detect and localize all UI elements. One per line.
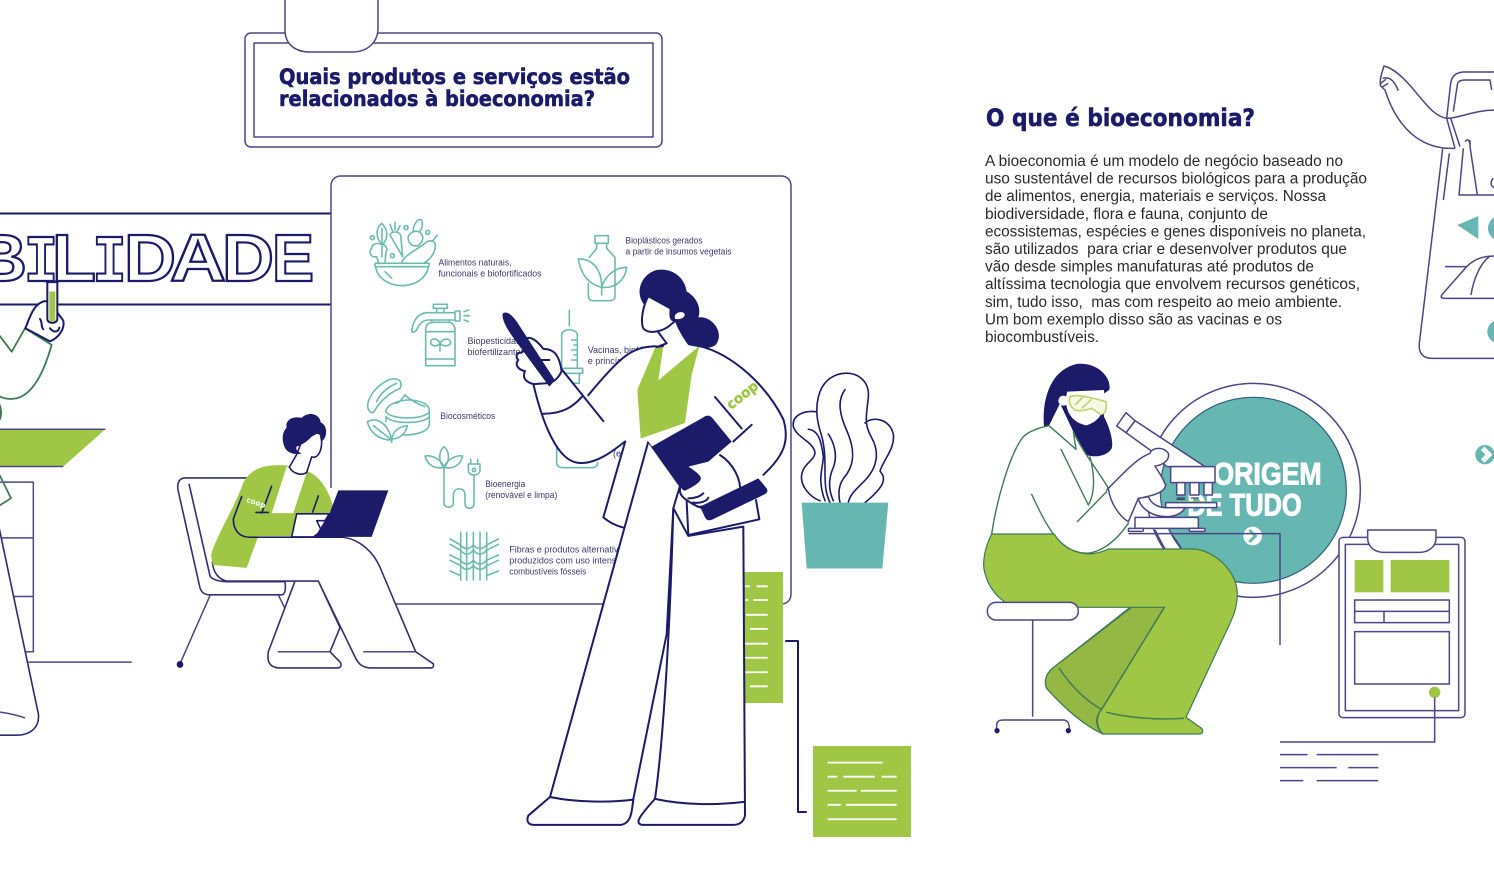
clipboard xyxy=(1339,530,1465,718)
jacket lines xyxy=(233,486,343,537)
illustration: woman presenting xyxy=(503,270,786,825)
hill xyxy=(1441,256,1494,298)
body paragraph: sim, tudo isso, mas com respeito ao meio ambiente. xyxy=(985,294,1342,311)
label: vacinas: Vacinas, biofármacos xyxy=(588,345,674,355)
callout lines xyxy=(1280,697,1435,781)
torso and right sleeve xyxy=(640,346,786,501)
pen xyxy=(503,313,555,387)
banner: BILIDADE: I xyxy=(24,226,58,302)
label: alimentos: funcionais e biofortificados xyxy=(438,268,542,278)
hand xyxy=(292,514,329,537)
trousers xyxy=(527,441,680,825)
illustration: green note sheets xyxy=(744,572,911,837)
arm and hand xyxy=(1107,448,1169,522)
neck and face xyxy=(642,296,675,347)
heading text: Quais produtos e serviços estão xyxy=(279,65,630,89)
coop sleeve logo: coop xyxy=(724,378,762,413)
body paragraph: ecossistemas, espécies e genes disponíveis no planeta, xyxy=(985,223,1366,240)
goggles xyxy=(1069,396,1106,414)
banner: BILIDADE: D xyxy=(222,221,274,296)
board icons, right column xyxy=(425,236,627,508)
label: fibras: combustíveis fósseis xyxy=(509,566,587,576)
label: biopesticidas: Biopesticidas e xyxy=(468,336,528,346)
label: alimentos: Alimentos naturais, xyxy=(438,258,512,268)
circle button: origem de tudo xyxy=(1146,383,1360,597)
sleeve xyxy=(0,328,52,505)
coat tail xyxy=(603,419,647,527)
label: bioplásticos: Bioplásticos gerados xyxy=(626,236,703,246)
banner: BILIDADE: E xyxy=(272,221,314,296)
fingers xyxy=(680,486,713,508)
pointing arm lines xyxy=(533,346,656,463)
connector xyxy=(786,641,806,812)
heading text: relacionados à bioeconomia? xyxy=(279,87,595,111)
test tube xyxy=(47,282,57,323)
connector line xyxy=(1128,534,1280,645)
body paragraph: de alimentos, energia, materiais e serviços. Nossa xyxy=(985,188,1326,205)
body paragraph: Um bom exemplo disso são as vacinas e os xyxy=(985,311,1282,328)
vest xyxy=(637,346,699,439)
note: tall xyxy=(744,572,783,703)
tablet top xyxy=(652,416,732,491)
label: fibras: produzidos com uso intenso de xyxy=(509,556,634,566)
hair xyxy=(1044,364,1112,456)
banner: BILIDADE: L xyxy=(52,221,96,296)
scientist leg xyxy=(0,524,39,735)
lower coat panel xyxy=(687,500,759,535)
banner: BILIDADE xyxy=(0,214,331,304)
neck and face xyxy=(289,431,322,474)
label: vacinas: e princípios ativos xyxy=(588,356,660,366)
icon: sprayer xyxy=(412,304,469,366)
icon: salad bowl xyxy=(370,220,437,286)
board labels xyxy=(438,236,732,576)
teal shapes xyxy=(1457,216,1478,239)
icon: box partly hidden xyxy=(557,443,598,468)
microscope xyxy=(1117,413,1217,549)
torso xyxy=(992,426,1128,550)
stool xyxy=(987,602,1078,733)
body paragraph: biocombustíveis. xyxy=(985,329,1099,346)
pointing arm fill xyxy=(533,346,657,463)
arm xyxy=(1380,66,1494,148)
button text: ORIGEM xyxy=(1213,457,1322,492)
pants xyxy=(212,537,433,668)
laptop xyxy=(315,490,388,537)
face xyxy=(1066,390,1104,425)
body paragraph: biodiversidade, flora e fauna, conjunto de xyxy=(985,206,1268,223)
label: fibras: Fibras e produtos alternativos xyxy=(509,544,628,554)
illustration: left scientist (partial) xyxy=(0,281,132,735)
pot xyxy=(802,503,888,569)
shaded leg xyxy=(1045,607,1164,734)
label: bioplásticos: a partir de insumos vegetais xyxy=(626,246,732,256)
trousers xyxy=(984,534,1237,734)
hair xyxy=(283,414,326,454)
body paragraph: vão desde simples manufaturas até produtos de xyxy=(985,259,1314,276)
leaves xyxy=(793,373,893,503)
illustration: potted plant xyxy=(793,373,893,569)
illustration: researcher at microscope xyxy=(984,364,1494,781)
illustration: seated person with laptop xyxy=(177,414,433,668)
note: square xyxy=(813,746,911,837)
label: fragment: (e xyxy=(613,448,621,458)
button text: DE TUDO xyxy=(1187,487,1302,522)
banner: BILIDADE: D xyxy=(124,221,176,296)
icon: syringe xyxy=(557,310,583,383)
heading box: produtos e serviços xyxy=(245,0,662,147)
label: bioenergia: (renovável e limpa) xyxy=(485,490,557,500)
banner: BILIDADE: A xyxy=(170,221,226,296)
button arrow xyxy=(1243,527,1262,545)
coop label: coop xyxy=(245,495,267,510)
section heading: O que é bioeconomia: O que é bioeconomia? xyxy=(986,104,1255,132)
hair xyxy=(640,270,719,348)
body paragraph: A bioeconomia é um modelo de negócio baseado no xyxy=(985,153,1343,170)
icon: fibers xyxy=(450,532,498,580)
icon: bottle with leaves xyxy=(578,236,627,301)
illustration: shopping bag (partial) xyxy=(1380,66,1494,358)
green desk xyxy=(0,429,105,467)
next arrow xyxy=(1475,445,1494,464)
panel: product board xyxy=(331,176,791,604)
hand xyxy=(25,301,64,341)
label: bioenergia: Bioenergia xyxy=(485,479,525,489)
hand xyxy=(517,338,562,384)
icon: plant and plug xyxy=(425,447,480,508)
tablet and holding hand xyxy=(652,416,767,535)
banner: BILIDADE: I xyxy=(92,226,126,302)
jacket xyxy=(211,465,333,568)
body paragraph: altíssima tecnologia que envolvem recursos genéticos, xyxy=(985,276,1360,293)
body paragraph: são utilizados para criar e desenvolver produtos que xyxy=(985,241,1347,258)
board icons, left column xyxy=(367,220,469,442)
tablet bottom xyxy=(700,478,767,520)
icon: cream jar xyxy=(367,379,429,442)
shelf xyxy=(0,482,132,662)
label: biopesticidas: biofertilizantes xyxy=(468,347,526,357)
body paragraph: uso sustentável de recursos biológicos para a produção xyxy=(985,171,1367,188)
sleeve inner xyxy=(720,455,740,493)
label: biocosméticos: Biocosméticos xyxy=(440,411,496,421)
chair xyxy=(178,478,285,595)
